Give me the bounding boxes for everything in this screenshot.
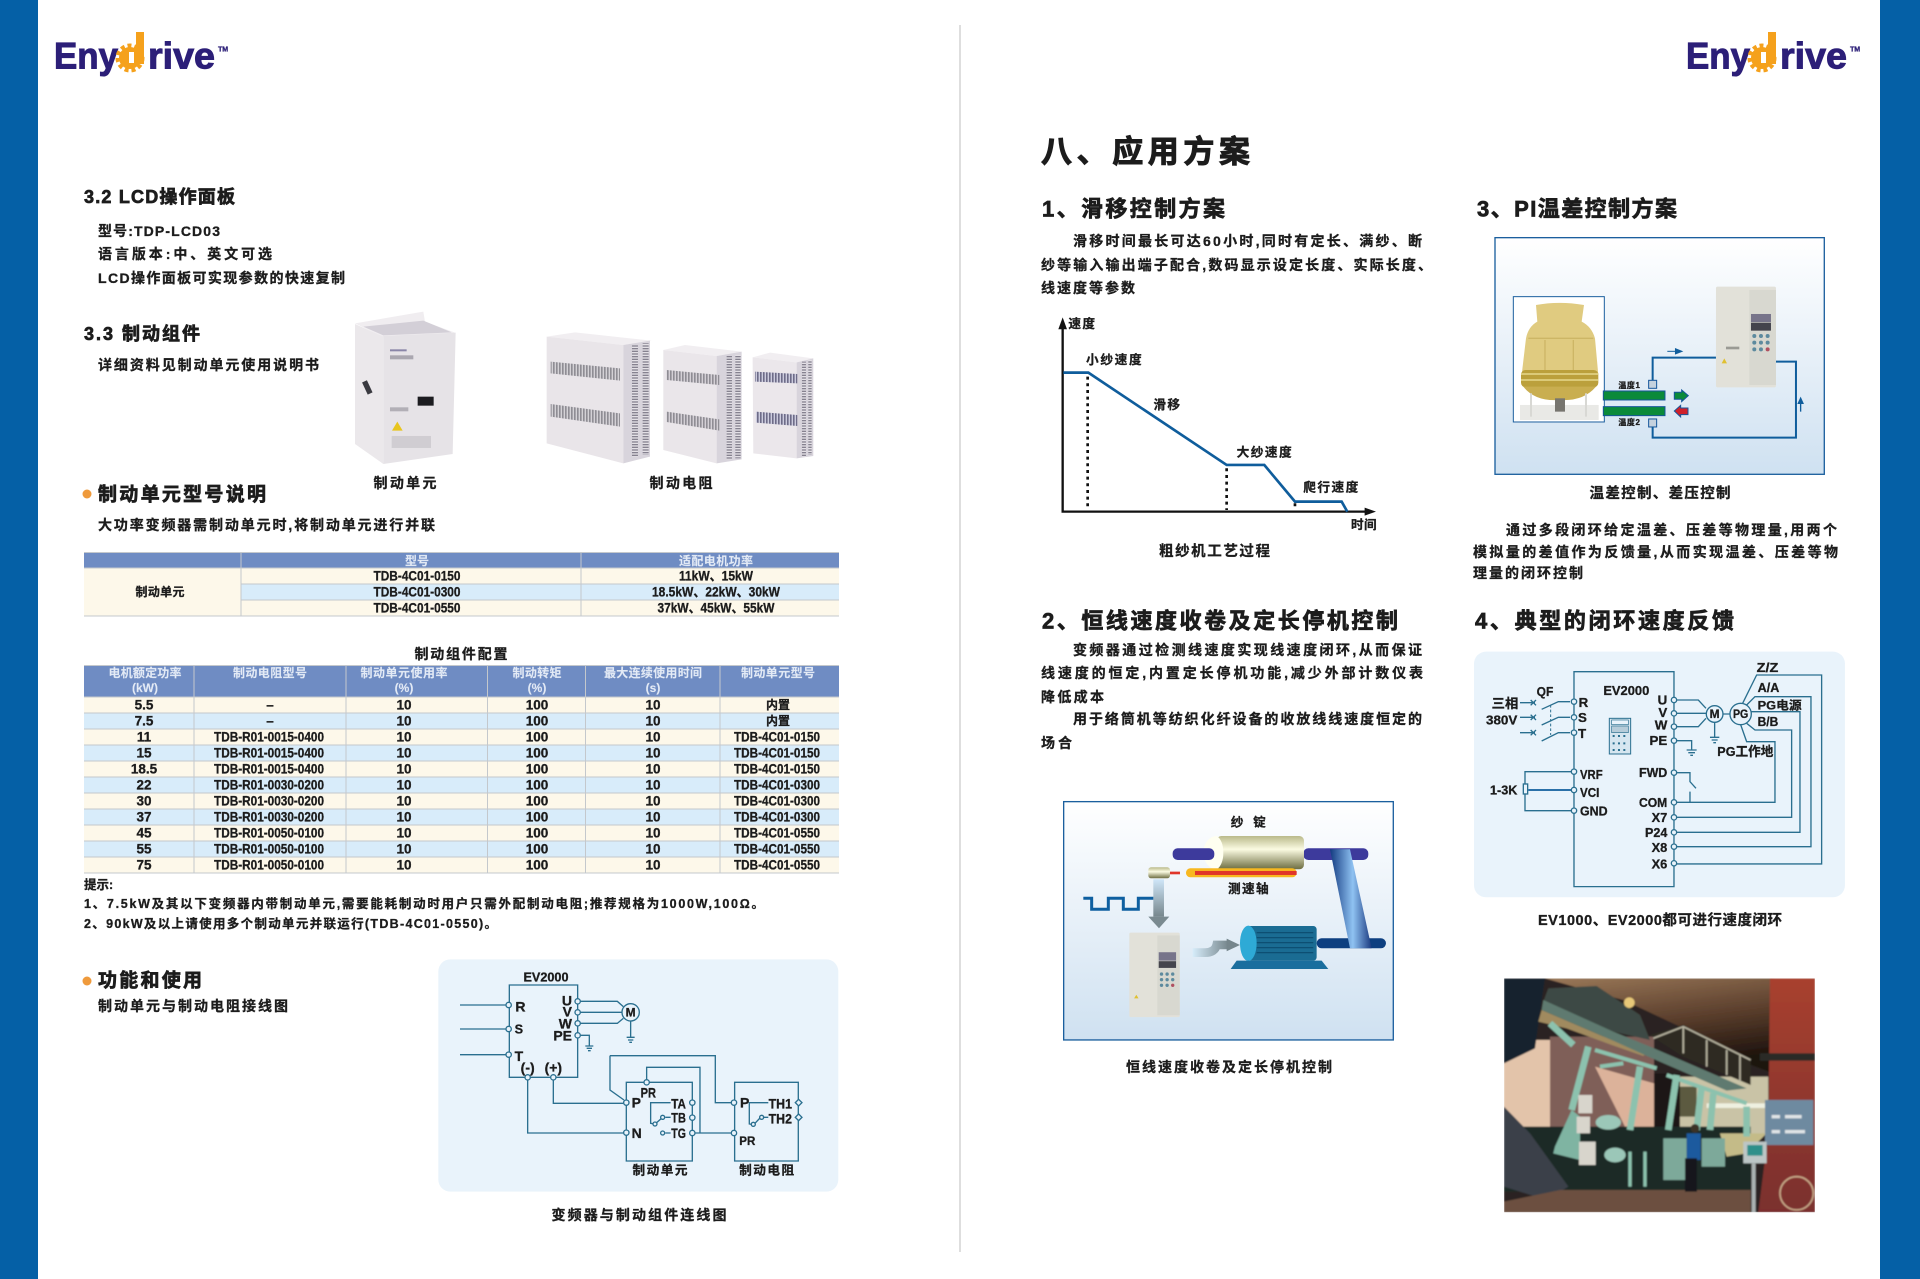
panel: closed loop circuit: B/B bbox=[1758, 714, 1779, 729]
table rows: TDB-R01-0050-0100 bbox=[214, 858, 324, 872]
table rows: 内置 bbox=[766, 713, 790, 728]
image: brake unit bbox=[355, 312, 456, 464]
cooling tower bbox=[1513, 297, 1604, 422]
panel: inverter and brake wiring diagram: TH1 bbox=[769, 1095, 792, 1111]
panel: inverter and brake wiring diagram: 制动单元 bbox=[632, 1163, 688, 1178]
table rows: 10 bbox=[396, 842, 412, 856]
panel: constant speed winding diagram bbox=[1064, 802, 1393, 1040]
table rows: TDB-4C01-0550 bbox=[734, 826, 820, 840]
table rows: TDB-4C01-0550 bbox=[734, 842, 820, 856]
panel: inverter and brake wiring diagram bbox=[438, 959, 838, 1192]
logo: right: Eny bbox=[1686, 36, 1750, 76]
caption: brake resistor: 制动电阻 bbox=[650, 475, 712, 491]
table: brake unit models: 18.5kW、22kW、30kW bbox=[652, 584, 780, 600]
bullet: functions bbox=[82, 976, 92, 986]
table rows: TDB-4C01-0150 bbox=[734, 746, 820, 760]
heading: 4 closed loop speed feedback: 4、典型的闭环速度反馈 bbox=[1475, 608, 1734, 634]
panel: closed loop circuit: X8 bbox=[1652, 840, 1667, 855]
panel: inverter and brake wiring diagram: PR bbox=[739, 1134, 756, 1148]
text block: PI control bbox=[1473, 522, 1838, 581]
panel: closed loop circuit: Z/Z bbox=[1757, 660, 1778, 675]
panel: inverter and brake wiring diagram: T bbox=[515, 1048, 524, 1064]
table rows: 22 bbox=[136, 778, 152, 792]
table rows: 10 bbox=[645, 730, 661, 744]
table rows: – bbox=[266, 714, 274, 728]
table header: 制动单元使用率 bbox=[360, 665, 448, 680]
panel: closed loop circuit: VRF bbox=[1580, 767, 1603, 782]
caption: roving process: 粗纱机工艺过程 bbox=[1159, 542, 1270, 560]
table header: 最大连续使用时间 bbox=[604, 665, 702, 680]
table rows: 45 bbox=[136, 826, 152, 840]
icon: keypad bbox=[1609, 718, 1631, 754]
table header: (kW) bbox=[132, 681, 158, 695]
panel: closed loop circuit: R bbox=[1579, 695, 1589, 710]
panel: closed loop circuit: V bbox=[1658, 705, 1667, 720]
table rows: 100 bbox=[526, 826, 548, 840]
text block: LCD panel details: 型号:TDP-LCD03 bbox=[98, 223, 220, 239]
table rows: 10 bbox=[645, 698, 661, 712]
panel: inverter and brake wiring diagram: EV2000 bbox=[523, 971, 568, 985]
table rows: 10 bbox=[396, 826, 412, 840]
table rows: 10 bbox=[396, 794, 412, 808]
table: brake unit models: 37kW、45kW、55kW bbox=[658, 600, 775, 616]
text block: LCD panel details bbox=[98, 223, 345, 286]
panel: closed loop circuit: 380V bbox=[1486, 712, 1517, 727]
table rows: 10 bbox=[396, 698, 412, 712]
table rows: TDB-R01-0050-0100 bbox=[214, 826, 324, 840]
text block: PI control: 通过多段闭环给定温差、压差等物理量,用两个 bbox=[1506, 522, 1837, 538]
table rows: 10 bbox=[645, 810, 661, 824]
panel: closed loop circuit: A/A bbox=[1758, 680, 1780, 695]
panel: inverter and brake wiring diagram: M bbox=[626, 1005, 636, 1019]
text block: constant linear speed: 用于络筒机等纺织化纤设备的收放线线速度恒定的 bbox=[1073, 711, 1422, 727]
text block: slip control bbox=[1041, 233, 1432, 296]
panel: inverter and brake wiring diagram: TB bbox=[671, 1110, 686, 1126]
panel: constant speed winding diagram: 纱 锭 bbox=[1231, 814, 1266, 829]
table rows: 10 bbox=[645, 794, 661, 808]
table rows: 30 bbox=[136, 794, 152, 808]
table rows: 10 bbox=[645, 826, 661, 840]
table rows: 10 bbox=[396, 730, 412, 744]
panel: closed loop circuit: 1-3K bbox=[1490, 782, 1518, 797]
panel: closed loop circuit: X6 bbox=[1652, 856, 1667, 871]
table rows: TDB-4C01-0150 bbox=[734, 762, 820, 776]
table rows: 100 bbox=[526, 762, 548, 776]
caption: speed closed loop: EV1000、EV2000都可进行速度闭环 bbox=[1538, 911, 1782, 929]
table header: (s) bbox=[646, 681, 660, 695]
table rows: 100 bbox=[526, 746, 548, 760]
table header: (%) bbox=[528, 681, 546, 695]
panel: inverter and brake wiring diagram: P bbox=[740, 1095, 749, 1111]
image: factory photo bbox=[1504, 978, 1815, 1212]
panel: closed loop circuit: PE bbox=[1650, 733, 1667, 748]
panel: inverter and brake wiring diagram: (-) bbox=[521, 1059, 535, 1075]
text block: slip control: 滑移时间最长可达60小时,同时有定长、满纱、断 bbox=[1073, 233, 1422, 249]
table rows: TDB-R01-0050-0100 bbox=[214, 842, 324, 856]
logo: right: rive bbox=[1780, 36, 1847, 76]
table: brake unit models bbox=[84, 552, 839, 616]
panel: inverter and brake wiring diagram: PR bbox=[641, 1085, 656, 1101]
table: brake unit models: TDB-4C01-0150 bbox=[374, 568, 460, 584]
table rows: 11 bbox=[137, 730, 152, 744]
text block: slip control: 线速度等参数 bbox=[1041, 280, 1135, 296]
table rows: TDB-R01-0015-0400 bbox=[214, 730, 324, 744]
logo: left bbox=[54, 32, 228, 76]
panel: closed loop circuit: X7 bbox=[1652, 810, 1667, 825]
panel: inverter and brake wiring diagram: (+) bbox=[545, 1059, 562, 1075]
heading: 3 PI temperature difference: 3、PI温差控制方案 bbox=[1477, 196, 1677, 222]
heading: 3.2 LCD panel: 3.2 LCD操作面板 bbox=[84, 187, 235, 207]
table rows: 7.5 bbox=[135, 714, 154, 728]
panel: closed loop circuit: PG电源 bbox=[1758, 698, 1802, 713]
table rows: 37 bbox=[136, 810, 152, 824]
panel: inverter and brake wiring diagram: R bbox=[515, 999, 525, 1015]
table: brake unit models: TDB-4C01-0300 bbox=[374, 584, 460, 600]
table rows: TDB-R01-0030-0200 bbox=[214, 778, 324, 792]
caption: constant speed winding: 恒线速度收卷及定长停机控制 bbox=[1126, 1059, 1332, 1075]
panel: closed loop circuit: M bbox=[1710, 707, 1720, 721]
caption: temperature and pressure control: 温差控制、差压控制 bbox=[1590, 484, 1730, 502]
panel: inverter and brake wiring diagram: W bbox=[559, 1015, 573, 1031]
heading: 2 constant linear speed: 2、恒线速度收卷及定长停机控制 bbox=[1042, 608, 1398, 634]
panel: closed loop circuit: P24 bbox=[1645, 825, 1668, 840]
table rows: 100 bbox=[526, 810, 548, 824]
table rows: 100 bbox=[526, 794, 548, 808]
text block: constant linear speed: 降低成本 bbox=[1041, 689, 1104, 705]
text block: LCD panel details: 语言版本:中、英文可选 bbox=[98, 246, 272, 262]
chart: roving process speed curve bbox=[1058, 316, 1377, 532]
table rows: TDB-R01-0030-0200 bbox=[214, 794, 324, 808]
table rows: 10 bbox=[645, 858, 661, 872]
panel: closed loop circuit: COM bbox=[1639, 795, 1667, 810]
panel: inverter and brake wiring diagram: S bbox=[515, 1022, 523, 1036]
table rows: 10 bbox=[396, 858, 412, 872]
logo: left: rive bbox=[148, 36, 215, 76]
table rows: TDB-4C01-0300 bbox=[734, 778, 820, 792]
table rows: TDB-4C01-0300 bbox=[734, 794, 820, 808]
table: brake component configuration bbox=[84, 665, 839, 873]
table rows: 75 bbox=[136, 858, 152, 872]
heading: 3.3 brake components: 3.3 制动组件 bbox=[84, 324, 200, 344]
table rows: – bbox=[266, 698, 274, 712]
heading: functions and use: 功能和使用 bbox=[98, 970, 202, 992]
table rows: 100 bbox=[526, 842, 548, 856]
table rows: 5.5 bbox=[135, 698, 154, 712]
logo: left: Eny bbox=[54, 36, 118, 76]
text block: PI control: 理量的闭环控制 bbox=[1473, 565, 1583, 581]
table rows: 15 bbox=[136, 746, 152, 760]
table header: 电机额定功率 bbox=[108, 665, 182, 680]
table: brake unit models: 型号 bbox=[405, 554, 429, 568]
panel: temperature difference diagram: 温度2 bbox=[1618, 417, 1641, 427]
table rows: 100 bbox=[526, 858, 548, 872]
image: brake resistors bbox=[547, 332, 813, 463]
chart: roving process speed curve: 大纱速度 bbox=[1237, 445, 1292, 460]
table rows: TDB-R01-0015-0400 bbox=[214, 762, 324, 776]
table rows: TDB-4C01-0150 bbox=[734, 730, 820, 744]
text: wiring diagram note: 制动单元与制动电阻接线图 bbox=[98, 998, 288, 1014]
panel: closed loop circuit: W bbox=[1655, 717, 1668, 732]
text: parallel connection note: 大功率变频器需制动单元时,将制动单元进行并联 bbox=[98, 517, 435, 533]
table rows: 100 bbox=[526, 778, 548, 792]
table header: 制动电阻型号 bbox=[233, 666, 307, 680]
text block: tips: 2、90kW及以上请使用多个制动单元并联运行(TDB-4C01-0550)。 bbox=[84, 916, 497, 931]
panel: inverter and brake wiring diagram: TG bbox=[671, 1125, 686, 1141]
panel: closed loop circuit: 三相 bbox=[1492, 696, 1518, 711]
chart: roving process speed curve: 时间 bbox=[1351, 518, 1377, 532]
logo: left: TM bbox=[218, 46, 228, 54]
panel: closed loop circuit: FWD bbox=[1639, 765, 1668, 780]
panel: inverter and brake wiring diagram: P bbox=[632, 1095, 641, 1111]
panel: constant speed winding diagram: 测速轴 bbox=[1228, 881, 1269, 896]
logo: right: TM bbox=[1850, 46, 1860, 54]
table rows: 10 bbox=[396, 746, 412, 760]
table rows: TDB-4C01-0550 bbox=[734, 858, 820, 872]
bullet: model description bbox=[82, 490, 92, 498]
text block: constant linear speed: 场合 bbox=[1041, 735, 1072, 751]
panel: inverter and brake wiring diagram: TH2 bbox=[769, 1110, 792, 1126]
table rows: 10 bbox=[396, 762, 412, 776]
text block: constant linear speed bbox=[1041, 642, 1423, 751]
table header bbox=[108, 665, 815, 695]
table rows: TDB-R01-0015-0400 bbox=[214, 746, 324, 760]
table rows: 内置 bbox=[766, 697, 790, 712]
caption: inverter and brake wiring: 变频器与制动组件连线图 bbox=[552, 1207, 726, 1223]
chart: roving process speed curve: 小纱速度 bbox=[1086, 352, 1142, 367]
table: brake unit models: 11kW、15kW bbox=[679, 568, 753, 584]
logo: right bbox=[1686, 32, 1860, 76]
table rows: 10 bbox=[645, 842, 661, 856]
text: brake details note: 详细资料见制动单元使用说明书 bbox=[98, 357, 319, 373]
panel: closed loop circuit: VCI bbox=[1580, 785, 1599, 800]
panel: closed loop circuit bbox=[1474, 652, 1845, 897]
panel: inverter and brake wiring diagram: U bbox=[562, 993, 572, 1009]
panel: closed loop circuit: PG bbox=[1733, 707, 1748, 721]
panel: temperature difference diagram: 温度1 bbox=[1618, 380, 1641, 390]
heading: 1 slip control: 1、滑移控制方案 bbox=[1042, 196, 1225, 222]
text block: slip control: 纱等输入输出端子配合,数码显示设定长度、实际长度、 bbox=[1041, 257, 1432, 273]
panel: inverter and brake wiring diagram: TA bbox=[671, 1095, 686, 1111]
heading: brake component configuration: 制动组件配置 bbox=[414, 646, 508, 662]
table rows: 10 bbox=[645, 778, 661, 792]
table rows: 100 bbox=[526, 714, 548, 728]
chart: roving process speed curve: 速度 bbox=[1068, 316, 1095, 331]
table rows: 10 bbox=[396, 714, 412, 728]
panel: closed loop circuit: GND bbox=[1580, 803, 1608, 818]
table rows: 100 bbox=[526, 730, 548, 744]
panel: inverter and brake wiring diagram: V bbox=[563, 1004, 573, 1020]
table rows: TDB-4C01-0300 bbox=[734, 810, 820, 824]
table rows: 10 bbox=[645, 714, 661, 728]
table rows: 10 bbox=[396, 778, 412, 792]
text block: tips bbox=[84, 877, 764, 931]
table rows: 10 bbox=[645, 746, 661, 760]
panel: inverter and brake wiring diagram: 制动电阻 bbox=[739, 1164, 794, 1178]
table rows: 10 bbox=[396, 810, 412, 824]
text block: LCD panel details: LCD操作面板可实现参数的快速复制 bbox=[98, 270, 345, 286]
panel: closed loop circuit: EV2000 bbox=[1603, 683, 1649, 698]
title: application solutions: 八、应用方案 bbox=[1041, 134, 1250, 170]
chart: roving process speed curve: 爬行速度 bbox=[1303, 479, 1359, 494]
panel: inverter and brake wiring diagram: N bbox=[632, 1125, 642, 1141]
text block: tips: 提示: bbox=[84, 877, 113, 892]
table: brake unit models: 适配电机功率 bbox=[679, 553, 753, 568]
heading: brake unit model description: 制动单元型号说明 bbox=[98, 484, 266, 506]
table rows: 18.5 bbox=[131, 762, 158, 776]
panel: temperature difference diagram bbox=[1495, 238, 1824, 474]
table: brake unit models: TDB-4C01-0550 bbox=[374, 600, 460, 616]
left blue band bbox=[0, 0, 38, 1279]
text block: constant linear speed: 变频器通过检测线速度实现线速度闭环,从而保证 bbox=[1073, 642, 1422, 658]
panel: closed loop circuit: S bbox=[1578, 710, 1587, 725]
text block: tips: 1、7.5kW及其以下变频器内带制动单元,需要能耗制动时用户只需外配制动电阻;推荐规格为1000W,100Ω。 bbox=[84, 896, 764, 911]
text block: PI control: 模拟量的差值作为反馈量,从而实现温差、压差等物 bbox=[1473, 544, 1838, 560]
panel: inverter and brake wiring diagram: PE bbox=[553, 1027, 572, 1043]
panel: closed loop circuit: T bbox=[1578, 726, 1586, 741]
table rows: TDB-R01-0030-0200 bbox=[214, 810, 324, 824]
table header: 制动单元型号 bbox=[741, 665, 815, 680]
right blue band bbox=[1880, 0, 1920, 1279]
panel: closed loop circuit: QF bbox=[1537, 684, 1553, 699]
table rows bbox=[131, 697, 820, 872]
table header: (%) bbox=[395, 681, 413, 695]
chart: roving process speed curve: 滑移 bbox=[1153, 397, 1180, 412]
caption: brake unit: 制动单元 bbox=[374, 475, 436, 491]
table rows: 55 bbox=[136, 842, 152, 856]
panel: closed loop circuit: U bbox=[1658, 692, 1667, 707]
table rows: 100 bbox=[526, 698, 548, 712]
panel: closed loop circuit: PG工作地 bbox=[1717, 743, 1774, 759]
table: brake unit models: 制动单元 bbox=[136, 584, 184, 599]
table rows: 10 bbox=[645, 762, 661, 776]
table header: 制动转矩 bbox=[512, 665, 562, 680]
text block: constant linear speed: 线速度的恒定,内置定长停机功能,减少外部计数仪表 bbox=[1041, 665, 1423, 681]
